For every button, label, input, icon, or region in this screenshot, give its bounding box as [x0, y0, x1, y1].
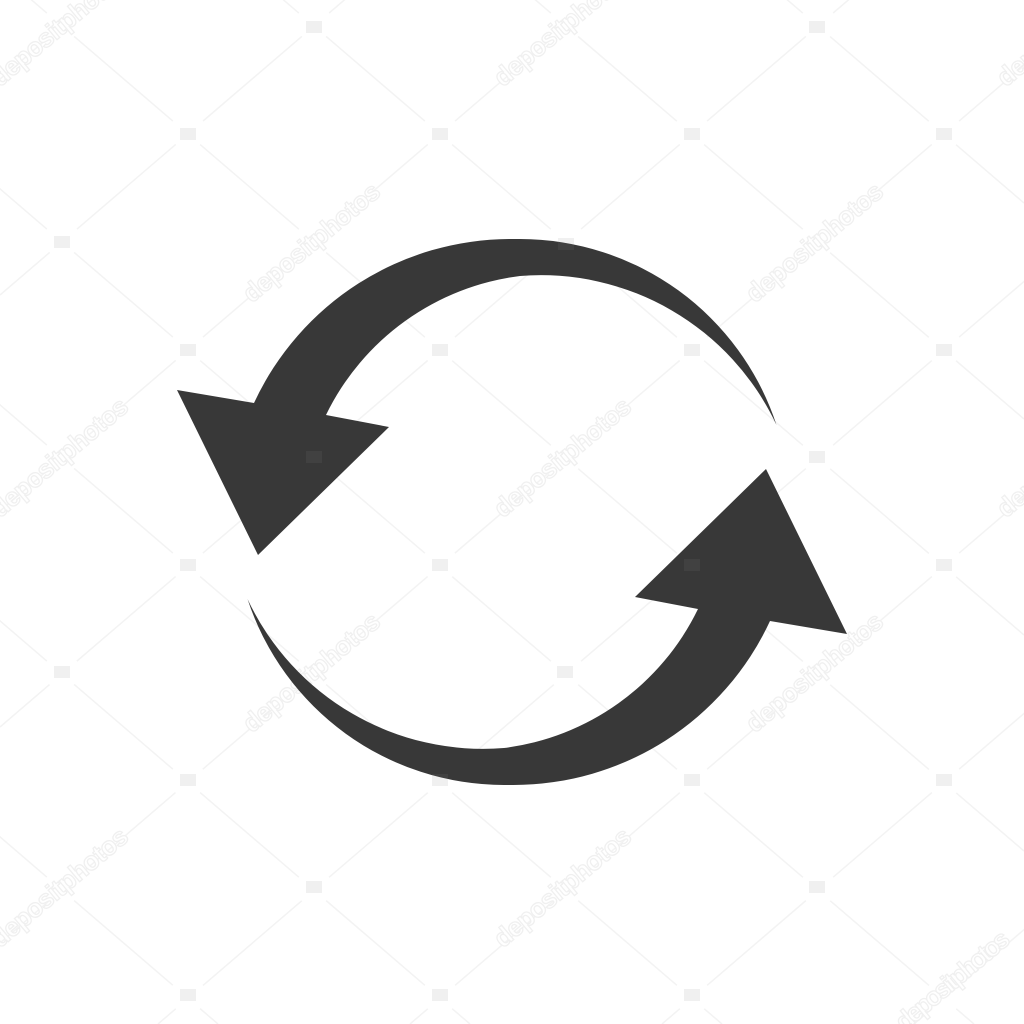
watermark text marks: depositphotos [739, 606, 889, 738]
arrow: bottom, pointing up-right [248, 469, 847, 785]
watermark text marks: depositphotos [487, 821, 637, 953]
arrow: top, pointing down-left [177, 239, 776, 555]
watermark text marks: depositphotos [236, 176, 386, 308]
watermark text marks: depositphotos [739, 176, 889, 308]
watermark text marks: depositphotos [487, 391, 637, 523]
watermark text marks: depositphotos [236, 606, 386, 738]
